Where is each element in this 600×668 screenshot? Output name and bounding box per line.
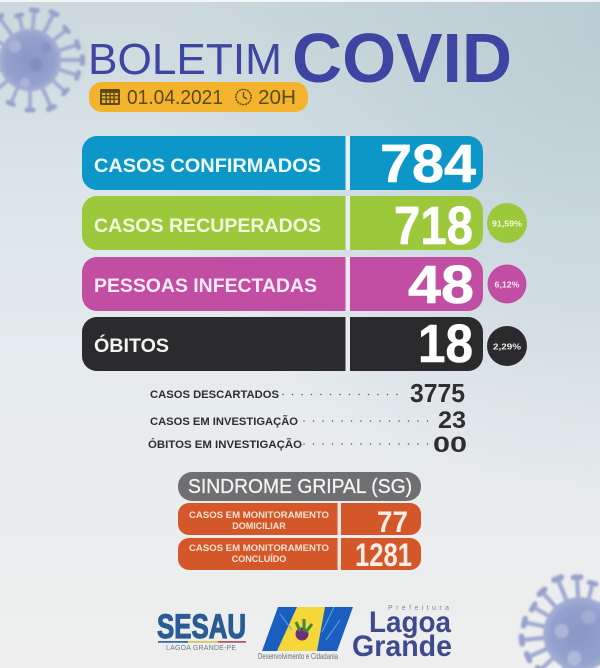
value: 784 — [380, 134, 476, 194]
row: casos em investigação — [150, 407, 466, 434]
icon: virus top left — [0, 10, 83, 110]
panel: pessoas infectadas — [82, 255, 483, 315]
date and time pill — [89, 82, 308, 112]
logo: prefeitura lagoa grande: Lagoa — [369, 606, 451, 639]
icon: virus bottom right — [521, 577, 600, 668]
logo: prefeitura lagoa grande — [352, 605, 452, 663]
panel: monitoramento domiciliar — [178, 503, 421, 539]
value: 18 — [418, 314, 473, 374]
icon: clock — [236, 89, 251, 105]
value: 48 — [408, 255, 474, 315]
logo: prefeitura lagoa grande: Grande — [352, 630, 452, 663]
row: óbitos em investigação: 00 — [433, 432, 467, 457]
logo: SESAU: LAGOA GRANDE-PE — [166, 645, 236, 652]
logo: desenvolvimento e cidadania flag: Desenvolvimento e Cidadania — [258, 651, 338, 661]
date: 01.04.2021 — [127, 87, 223, 109]
row: casos descartados: 3775 — [410, 378, 465, 408]
label: CASOS RECUPERADOS — [94, 216, 321, 237]
badge: 6,12% — [488, 264, 526, 304]
badge: 6,12%: 6,12% — [494, 280, 520, 290]
time: 20H — [258, 87, 296, 109]
row: óbitos em investigação: ÓBITOS EM INVESTIGAÇÃO — [148, 438, 302, 451]
title: COVID: COVID — [292, 19, 512, 97]
value: 1281 — [355, 537, 412, 573]
label — [189, 510, 329, 531]
logo: prefeitura lagoa grande: Prefeitura — [388, 605, 449, 612]
value: 77 — [377, 506, 408, 539]
panel: casos confirmados — [82, 134, 483, 194]
panel: casos recuperados — [82, 196, 483, 256]
row: casos em investigação: 23 — [438, 407, 466, 434]
label: CONCLUÍDO — [232, 554, 286, 564]
row: casos descartados — [150, 378, 465, 408]
value: 718 — [394, 196, 473, 256]
row: óbitos em investigação — [148, 432, 467, 457]
badge: 2,29%: 2,29% — [493, 342, 522, 352]
label: CASOS EM MONITORAMENTO — [189, 510, 329, 520]
label — [189, 543, 329, 564]
logo: SESAU: SESAU — [157, 608, 246, 646]
title — [88, 19, 512, 97]
stat list — [148, 378, 467, 457]
panel: síndrome gripal heading: SINDROME GRIPAL (SG) — [188, 476, 412, 498]
crest — [296, 619, 312, 640]
badge: 91,59%: 91,59% — [492, 218, 522, 228]
badge: 91,59% — [487, 203, 527, 243]
logo: desenvolvimento e cidadania flag — [258, 607, 353, 661]
icon: calendar — [100, 89, 120, 105]
badge: 2,29% — [487, 326, 527, 366]
label: ÓBITOS — [94, 335, 169, 357]
title: BOLETIM: BOLETIM — [88, 35, 282, 84]
row: casos em investigação: CASOS EM INVESTIGAÇÃO — [150, 415, 298, 428]
panel: óbitos — [82, 314, 483, 374]
label: CASOS CONFIRMADOS — [94, 156, 321, 177]
label: PESSOAS INFECTADAS — [94, 276, 317, 297]
row: casos descartados: CASOS DESCARTADOS — [150, 389, 279, 401]
label: CASOS EM MONITORAMENTO — [189, 543, 329, 553]
logo: SESAU — [157, 608, 246, 652]
label: DOMICILIAR — [232, 521, 286, 531]
panel: monitoramento concluído — [178, 537, 421, 573]
